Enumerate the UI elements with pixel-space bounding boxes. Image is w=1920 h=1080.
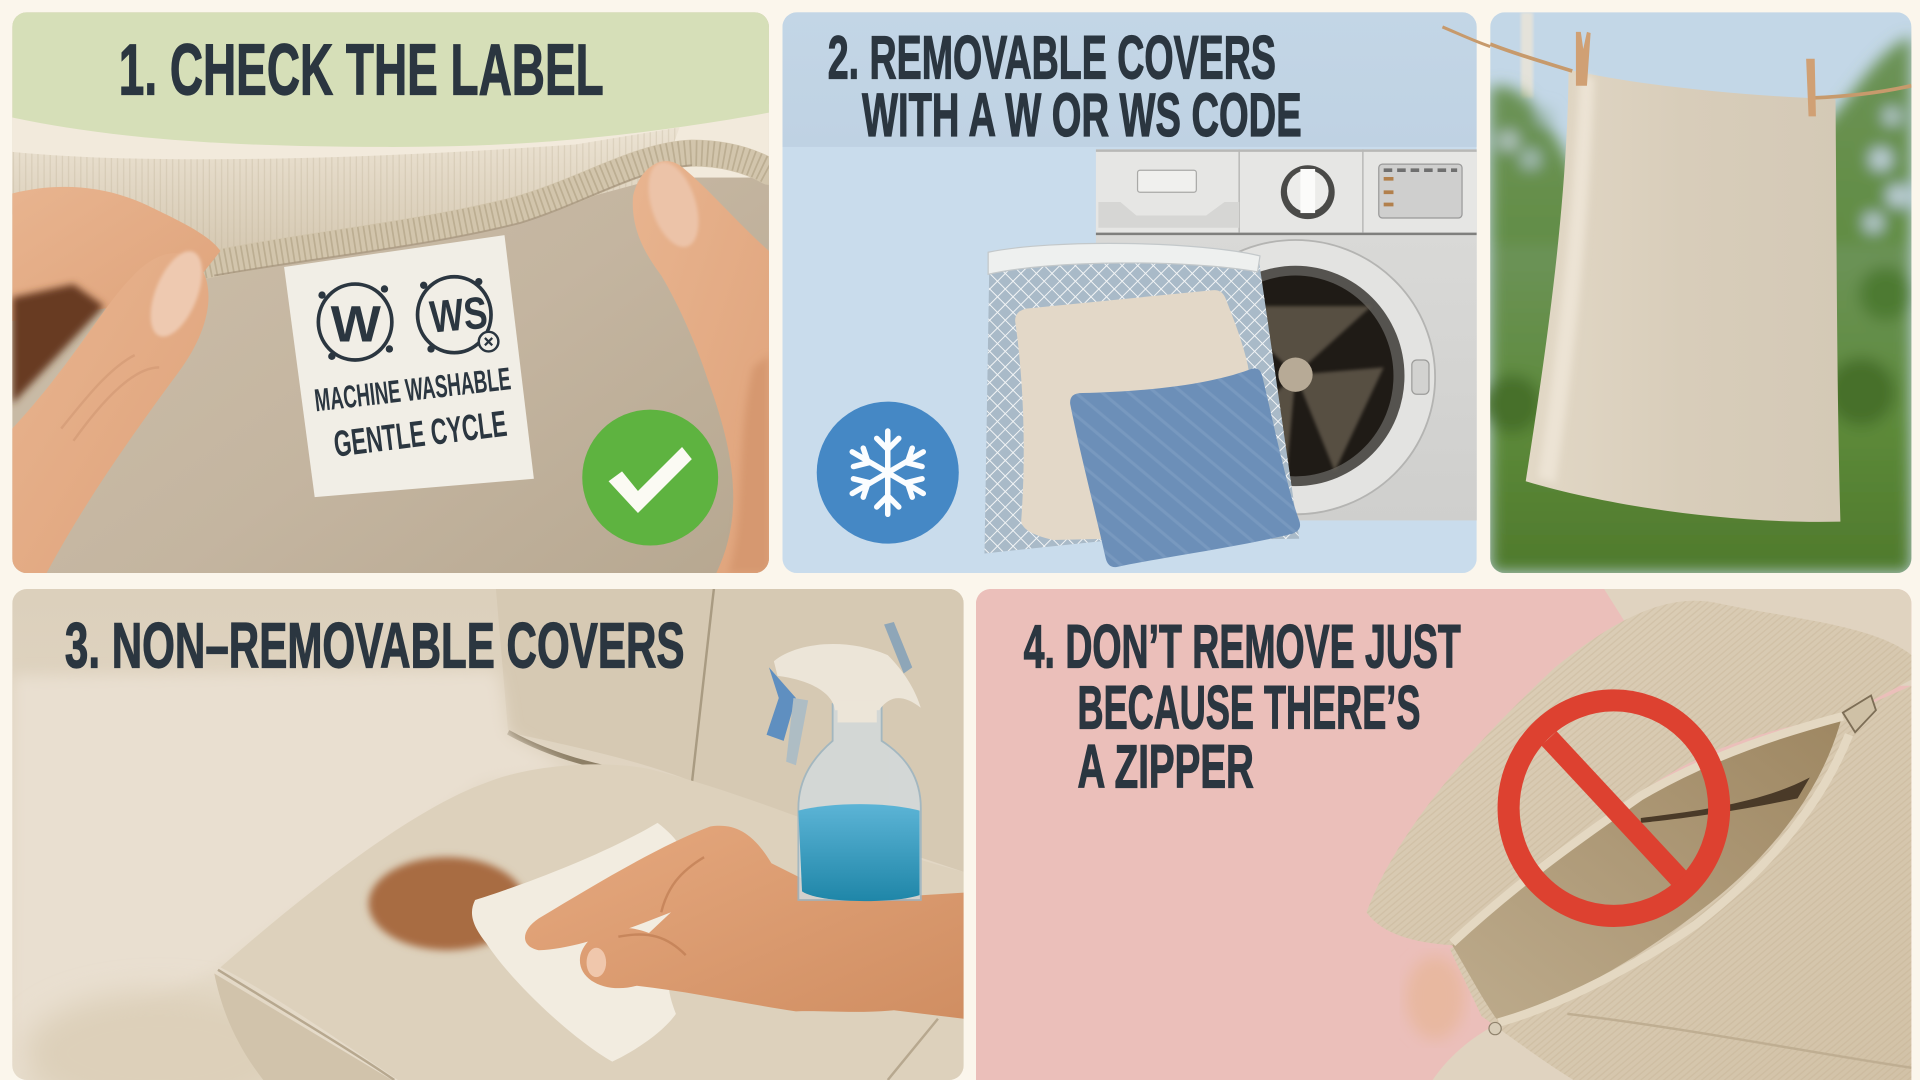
trees	[1483, 37, 1913, 573]
open zipper interior	[1452, 718, 1842, 1019]
icon: WS wash symbol: WS	[428, 287, 489, 343]
heading line one: 4. DON’T REMOVE JUST	[1024, 612, 1461, 680]
white cleaning cloth	[472, 823, 686, 1062]
clothespin left	[1576, 32, 1591, 86]
sewn care label	[284, 235, 534, 497]
zippered cushion	[1367, 601, 1911, 1080]
brown stain	[369, 857, 525, 950]
clothesline	[1490, 44, 1911, 98]
green heading banner	[12, 12, 769, 147]
heading: 1. CHECK THE LABEL	[119, 30, 604, 110]
panel: 1. check the label	[12, 12, 769, 573]
upper half of cushion	[1367, 601, 1911, 945]
heading: 3. NON–REMOVABLE COVERS	[65, 610, 684, 681]
detergent drawer	[1098, 202, 1239, 228]
sofa back cushions	[496, 589, 964, 872]
label text second line: GENTLE CYCLE	[331, 403, 509, 465]
heading line one: 2. REMOVABLE COVERS	[828, 23, 1276, 91]
heading line three: A ZIPPER	[1078, 732, 1254, 800]
left cushion	[12, 670, 567, 982]
zipper pull	[1843, 696, 1876, 732]
display	[1379, 164, 1462, 218]
sofa behind	[1433, 589, 1911, 1080]
ribbed collar	[12, 127, 769, 276]
zipper piping	[1452, 716, 1849, 1022]
spray bottle	[767, 622, 921, 901]
dial	[1281, 165, 1335, 219]
panel: towel drying on clothesline	[1483, 12, 1913, 573]
washer door	[1238, 239, 1436, 516]
icon: green check badge	[582, 410, 718, 546]
clothesline end over panel gap	[1442, 27, 1490, 47]
right hand	[633, 156, 769, 573]
clothespin right	[1806, 59, 1816, 116]
hanging towel	[1526, 70, 1840, 522]
icon: W wash symbol: W	[331, 295, 381, 353]
blue cushion cover	[1070, 368, 1300, 567]
heading line two: BECAUSE THERE’S	[1078, 674, 1420, 742]
washing machine	[1096, 149, 1482, 520]
beige cushion cover	[1015, 290, 1254, 540]
icon: W wash symbol	[318, 284, 393, 360]
soft orange shadow near cushion	[1406, 956, 1464, 1040]
hand blotting stain	[525, 826, 964, 1019]
icon: WS wash symbol	[418, 277, 498, 353]
panel: 4. don't remove just because there's a zipper	[976, 589, 1911, 1080]
icon: red prohibition sign	[1509, 700, 1719, 916]
heading line two: WITH A W OR WS CODE	[862, 81, 1302, 149]
panel: 2. removable covers	[782, 12, 1482, 573]
soft blurred lower left	[24, 992, 294, 1080]
lower half of cushion	[1450, 686, 1911, 1080]
seat cushion	[214, 764, 964, 1080]
panel: 3. non-removable covers	[12, 589, 964, 1080]
label text: MACHINE WASHABLE	[313, 360, 513, 418]
mesh laundry basket	[984, 243, 1299, 553]
left hand	[12, 187, 220, 573]
icon: snowflake cold wash badge	[817, 402, 959, 544]
